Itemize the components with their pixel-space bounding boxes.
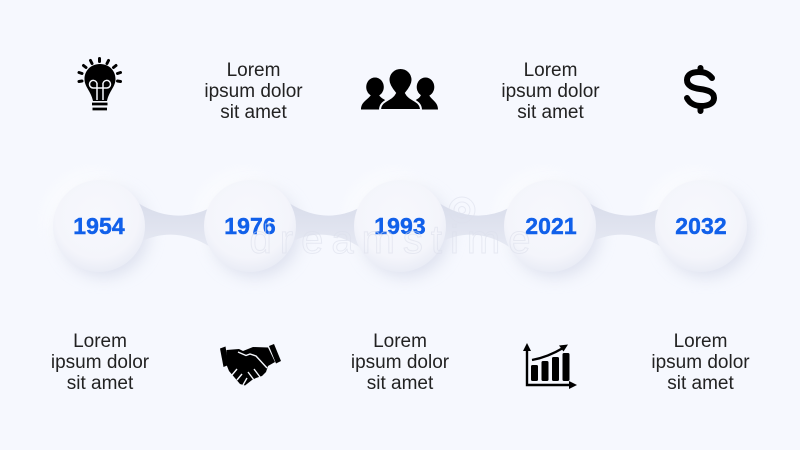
icon: handshake [220,344,281,386]
text: bottom label 1: sit amet [67,373,134,394]
text: top label 4: Lorem [524,60,577,81]
text: top label 2: ipsum dolor [204,81,303,102]
text: bottom label 1: ipsum dolor [51,352,150,373]
text: bottom label 3: Lorem [373,331,427,352]
year circle 1993: 1993 [374,213,426,239]
year circle 2021 [504,180,596,272]
text: bottom label 3: sit amet [367,373,434,394]
text: top label 4: sit amet [517,102,584,123]
text: top label 2: sit amet [220,102,287,123]
icon: bar chart with rising arrow [523,343,577,389]
text: top label 2: Lorem [227,60,280,81]
year circle 1954: 1954 [73,213,125,239]
icon: light bulb [79,58,120,109]
text: top label 4: ipsum dolor [501,81,600,102]
watermark: dreamstime [250,218,538,262]
watermark [250,197,538,262]
year circle 2032: 2032 [675,213,727,239]
text: bottom label 1: Lorem [73,331,127,352]
text: bottom label 3: ipsum dolor [351,352,450,373]
text: bottom label 5: Lorem [674,331,727,352]
text: bottom label 5: sit amet [667,373,734,394]
connectors between year circles [138,203,663,248]
year circle 2021: 2021 [525,213,577,239]
icon: dollar sign [687,68,714,111]
year circle 2032 [655,180,747,272]
soft circle shadows [47,174,751,277]
year circle 1993 [354,180,446,272]
icon: group of people [361,68,438,110]
year circle 1976: 1976 [224,213,276,239]
year circle 1976 [204,180,296,272]
year circle 1954 [53,180,145,272]
text: bottom label 5: ipsum dolor [651,352,750,373]
